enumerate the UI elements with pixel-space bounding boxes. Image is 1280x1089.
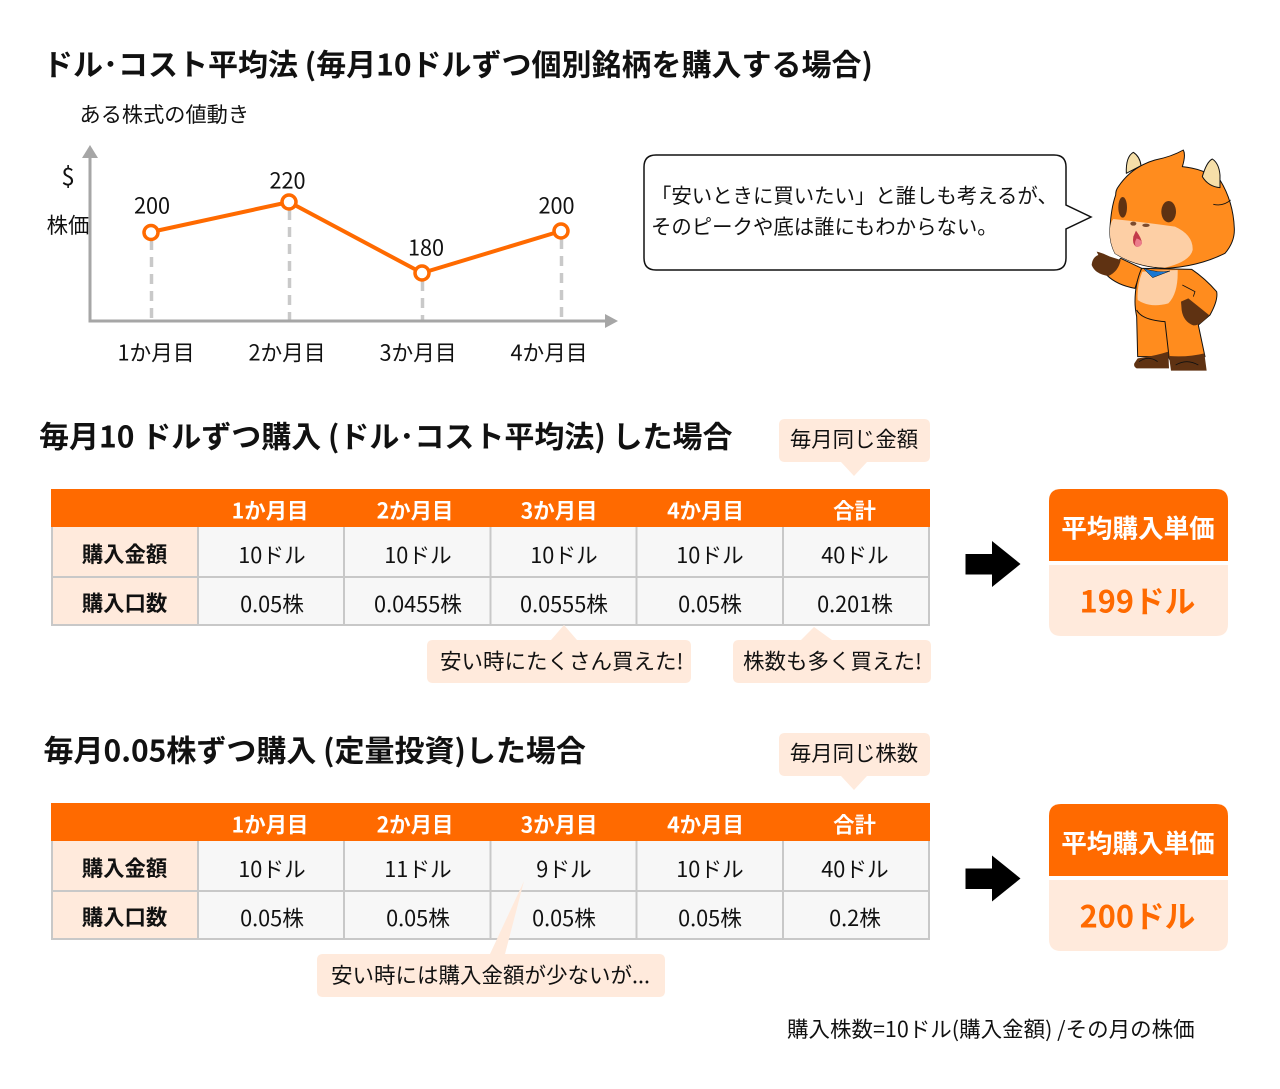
speech bubble: そのピークや底は誰にもわからない。	[651, 210, 998, 240]
value labels: 200	[538, 190, 575, 220]
mascot head	[1110, 150, 1234, 268]
speech bubble	[644, 155, 1091, 270]
callout: bought many when cheap: 安い時にたくさん買えた!	[440, 645, 683, 676]
x axis labels: 4か月目	[510, 336, 588, 368]
arrow	[966, 856, 1020, 902]
row: purchase amount: 40ドル	[821, 539, 889, 570]
result card: 199 dollars: 平均購入単価	[1061, 508, 1215, 546]
table: fixed share count	[51, 803, 930, 940]
heading: fixed share count: 毎月0.05株ずつ購入 (定量投資)した場合	[44, 726, 586, 770]
result card: 199 dollars: 199ドル	[1080, 576, 1195, 622]
icon: orange bull mascot	[1092, 150, 1234, 371]
row: shares purchased: 0.201株	[817, 588, 893, 619]
callout: more shares: 株数も多く買えた!	[743, 645, 922, 676]
row: purchase amount	[82, 852, 889, 884]
arrow	[966, 541, 1020, 587]
row: shares purchased: 購入口数	[82, 587, 167, 618]
header row: 合計	[833, 494, 876, 526]
row: shares purchased: 0.05株	[678, 902, 742, 933]
y axis labels	[47, 157, 89, 240]
x axis labels: 2か月目	[248, 336, 326, 368]
mascot body	[1092, 252, 1217, 371]
header row: 1か月目	[232, 808, 308, 840]
result card: 200 dollars: 200ドル	[1080, 892, 1195, 936]
footnote: 購入株数=10ドル(購入金額) /その月の株価	[787, 1013, 1195, 1044]
callout: same shares	[779, 733, 930, 790]
table: fixed dollar amount	[51, 489, 930, 626]
row: shares purchased: 0.0555株	[520, 588, 608, 619]
axes	[82, 145, 618, 328]
row: shares purchased: 0.05株	[240, 588, 304, 619]
line chart: stock price	[47, 145, 618, 368]
value labels	[134, 164, 575, 262]
header row: 2か月目	[377, 808, 453, 840]
heading: dollar cost averaging: 毎月10 ドルずつ購入 (ドル･コスト平均法) した場合	[39, 412, 733, 456]
x axis labels: 1か月目	[117, 336, 195, 368]
result card: 200 dollars	[1049, 804, 1228, 951]
header row: 3か月目	[521, 808, 597, 840]
callout: lower spend when cheap: 安い時には購入金額が少ないが...	[331, 959, 650, 990]
header row: 1か月目	[232, 494, 308, 526]
title: ドル･コスト平均法 (毎月10ドルずつ個別銘柄を購入する場合)	[43, 40, 873, 84]
row: purchase amount: 10ドル	[384, 539, 452, 570]
row: shares purchased	[82, 901, 881, 933]
row: shares purchased: 購入口数	[82, 901, 167, 932]
value labels: 180	[408, 232, 444, 262]
header row: 2か月目	[377, 494, 453, 526]
x axis labels	[117, 336, 588, 368]
price line	[151, 202, 561, 273]
row: purchase amount: 10ドル	[676, 539, 744, 570]
row: purchase amount: 10ドル	[238, 853, 306, 884]
callout: lower spend when cheap	[317, 881, 665, 997]
callout: same shares: 毎月同じ株数	[790, 737, 918, 768]
callout: same amount	[779, 419, 930, 476]
row: shares purchased: 0.0455株	[374, 588, 462, 619]
row: purchase amount: 10ドル	[530, 539, 598, 570]
header row: 合計	[833, 808, 876, 840]
x axis labels: 3か月目	[379, 336, 457, 368]
chart subtitle: ある株式の値動き	[80, 98, 249, 129]
value labels: 220	[269, 164, 306, 196]
header row: 4か月目	[667, 494, 744, 526]
row: purchase amount	[82, 538, 889, 570]
header row: 3か月目	[521, 494, 597, 526]
data points	[144, 195, 568, 280]
row: purchase amount: 9ドル	[536, 853, 592, 884]
row: shares purchased: 0.05株	[532, 902, 596, 933]
row: purchase amount: 11ドル	[384, 853, 452, 884]
row: purchase amount: 購入金額	[82, 538, 168, 569]
callout: more shares	[733, 627, 931, 683]
row: shares purchased: 0.05株	[240, 902, 304, 933]
result card: 199 dollars	[1049, 489, 1228, 636]
speech bubble: 「安いときに買いたい」と誰しも考えるが、	[651, 179, 1058, 209]
row: shares purchased: 0.2株	[829, 902, 881, 933]
row: shares purchased: 0.05株	[386, 902, 450, 933]
row: purchase amount: 購入金額	[82, 852, 168, 883]
row: purchase amount: 40ドル	[821, 853, 889, 884]
row: purchase amount: 10ドル	[676, 853, 744, 884]
y axis labels: 株価	[47, 209, 89, 240]
callout: bought many when cheap	[427, 625, 691, 683]
header row: 4か月目	[667, 808, 744, 840]
y axis labels: $	[61, 157, 75, 192]
row: shares purchased: 0.05株	[678, 588, 742, 619]
result card: 200 dollars: 平均購入単価	[1061, 824, 1215, 860]
header row	[232, 494, 876, 526]
row: shares purchased	[82, 587, 893, 619]
header row	[232, 808, 876, 840]
row: purchase amount: 10ドル	[238, 539, 306, 570]
callout: same amount: 毎月同じ金額	[790, 423, 918, 454]
value labels: 200	[134, 190, 170, 220]
